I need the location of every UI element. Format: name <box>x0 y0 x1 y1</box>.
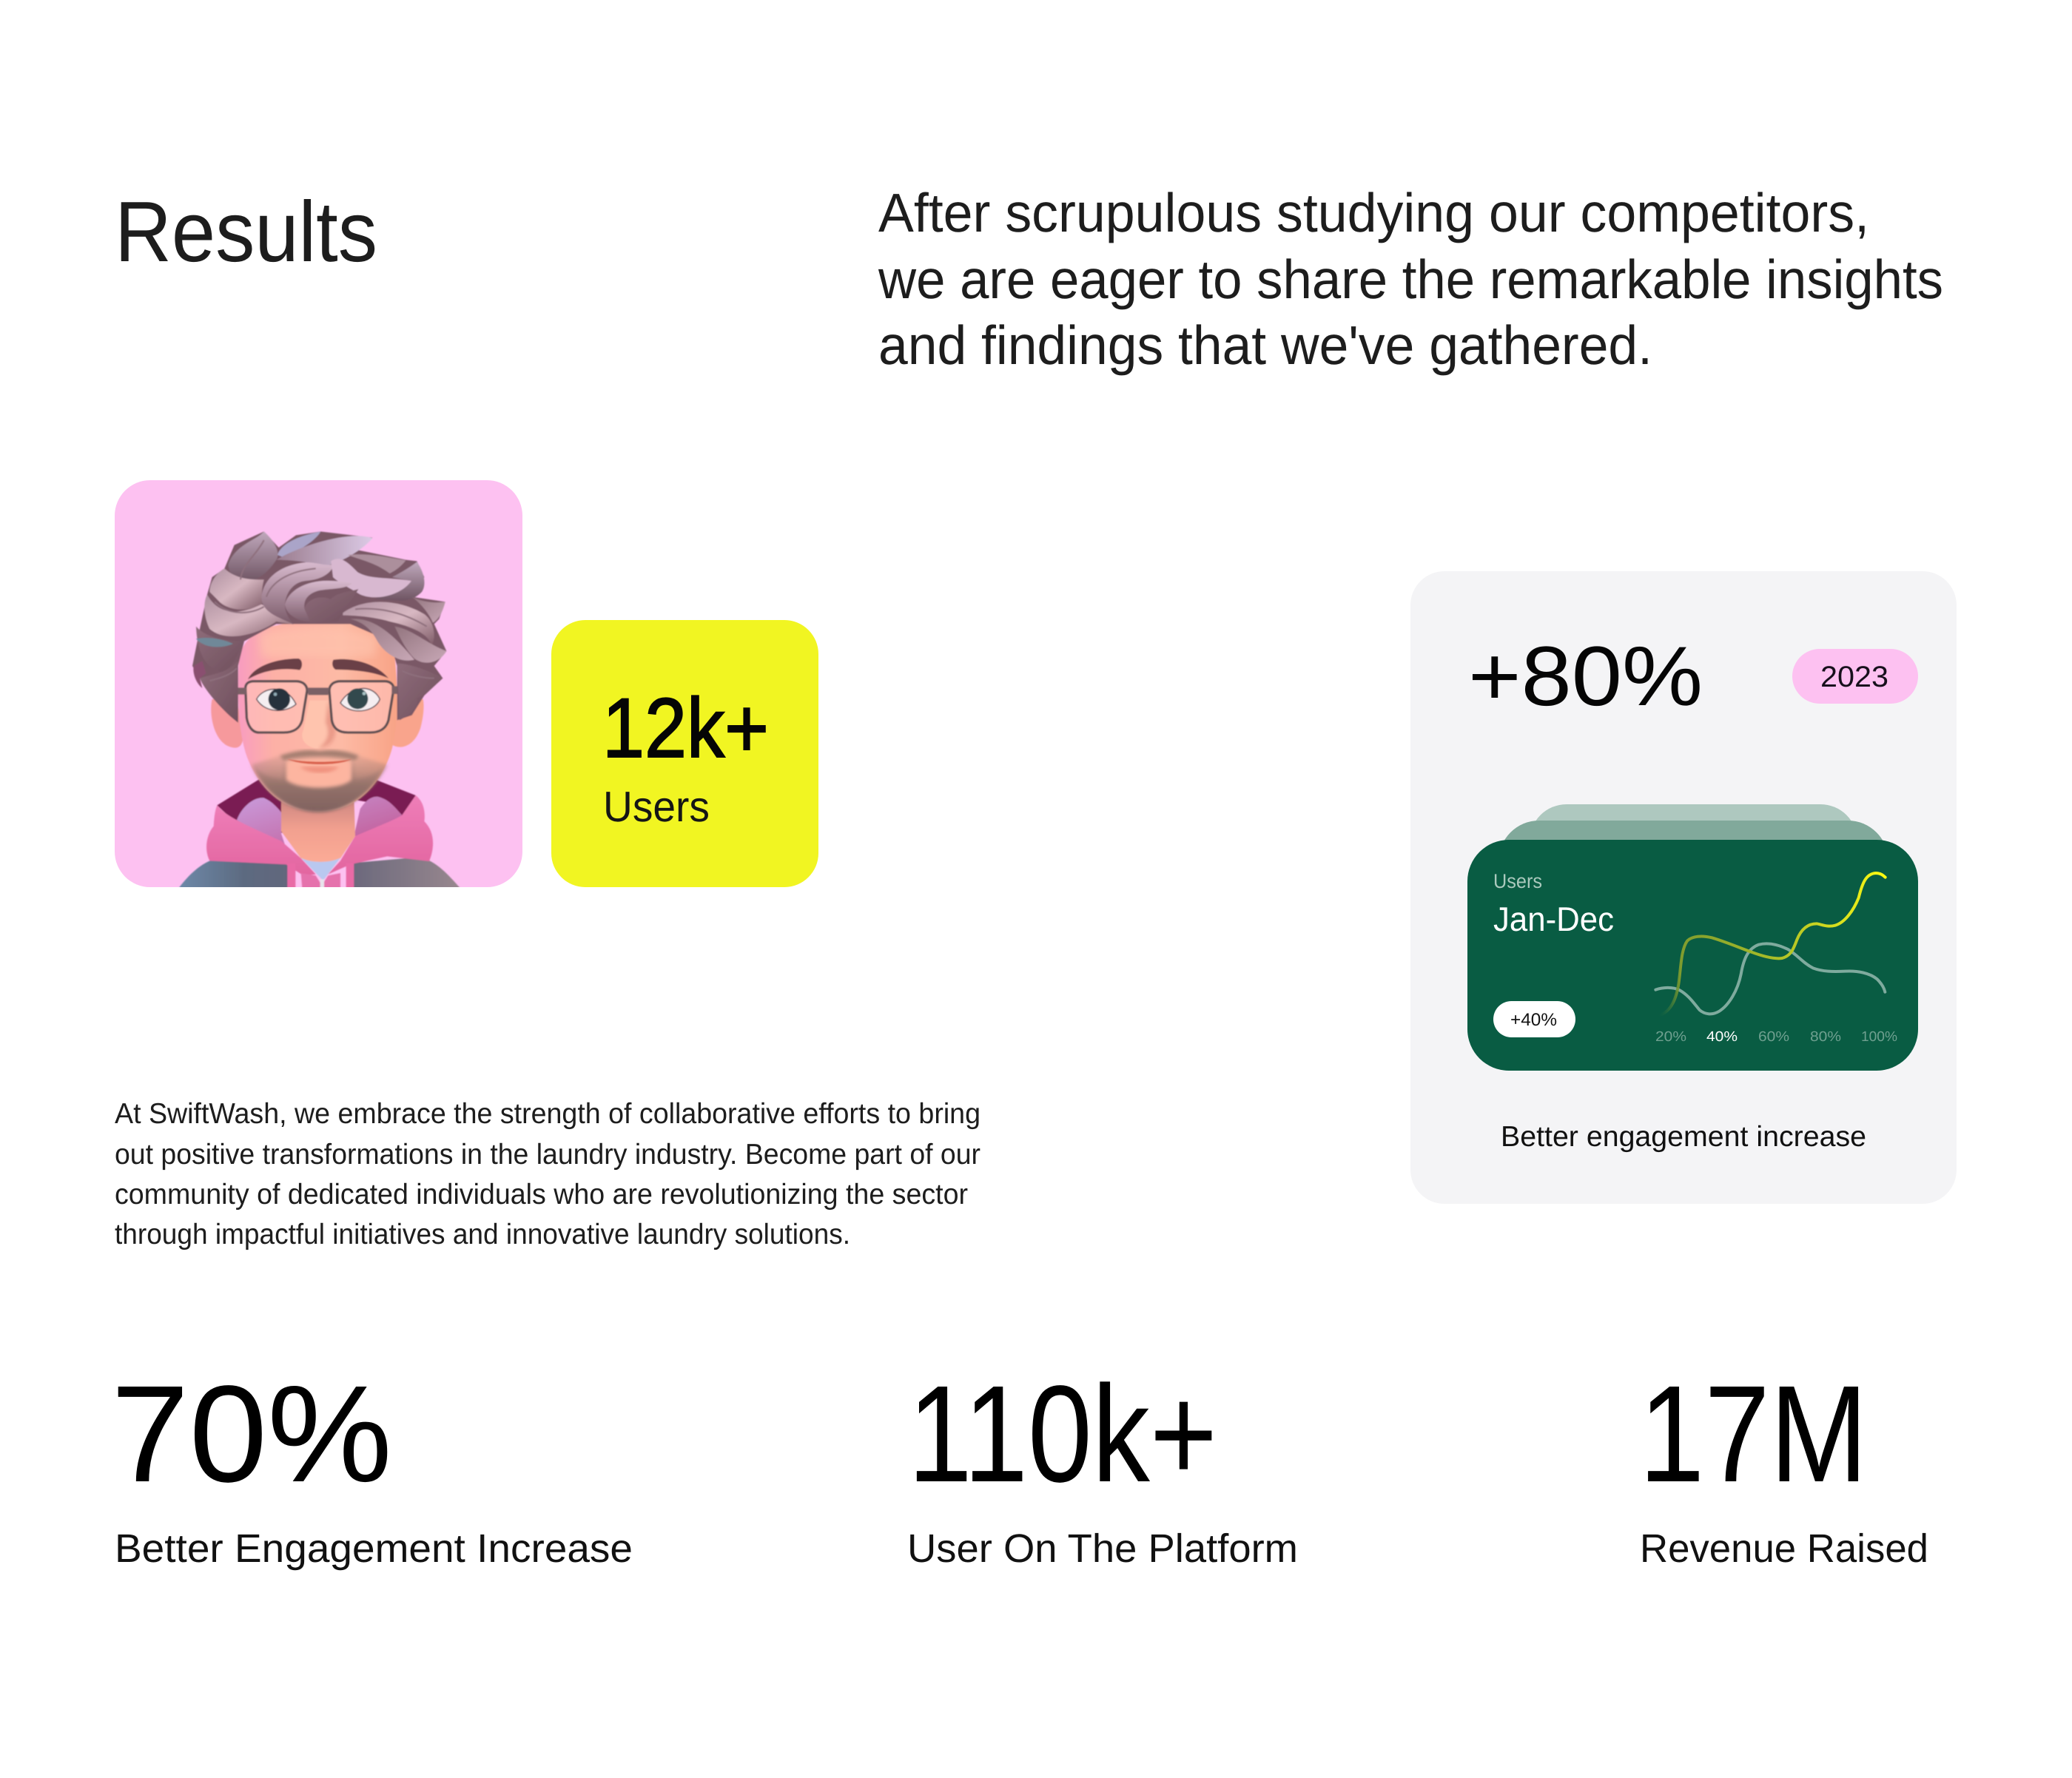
body paragraph: At SwiftWash, we embrace the strength of collaborative efforts to bring <box>115 1098 980 1130</box>
card caption: Better engagement increase <box>1501 1121 1866 1153</box>
stat: 110k+: 110k+ <box>908 1358 1217 1511</box>
stat: 70% <box>111 1358 633 1571</box>
intro paragraph: we are eager to share the remarkable insights <box>878 249 1943 310</box>
body paragraph: out positive transformations in the laundry industry. Become part of our <box>115 1139 980 1171</box>
stat: 110k+ <box>907 1358 1298 1571</box>
stat: 70%: 70% <box>111 1358 392 1511</box>
change badge <box>1493 1001 1575 1037</box>
stat label: User On The Platform <box>907 1526 1298 1571</box>
chart axis labels: 80% <box>1810 1029 1841 1045</box>
chart axis labels: 60% <box>1758 1029 1789 1045</box>
body paragraph <box>115 1098 980 1250</box>
stat value: 12k+ <box>602 681 769 775</box>
chart axis labels: 40% <box>1706 1029 1738 1045</box>
stacked back cards <box>1498 804 1888 909</box>
stat: 17M: 17M <box>1639 1358 1868 1511</box>
intro paragraph: After scrupulous studying our competitors, <box>878 182 1869 243</box>
year badge: 2023 <box>1820 661 1888 693</box>
green chart card <box>1467 840 1918 1071</box>
intro paragraph <box>878 182 1943 376</box>
chart axis labels: 100% <box>1861 1029 1897 1045</box>
card label: Users <box>1493 870 1542 892</box>
stat label: Revenue Raised <box>1640 1526 1928 1571</box>
intro paragraph: and findings that we've gathered. <box>878 314 1652 376</box>
stat label: Better Engagement Increase <box>115 1526 633 1571</box>
chart axis labels: 20% <box>1655 1029 1686 1045</box>
stat label: Users <box>603 783 710 831</box>
body paragraph: community of dedicated individuals who are revolutionizing the sector <box>115 1179 968 1210</box>
chart axis labels <box>1655 1029 1897 1045</box>
headline value: +80% <box>1468 630 1703 724</box>
avatar panel <box>115 480 522 888</box>
year badge <box>1792 649 1918 704</box>
title: Results <box>115 183 377 280</box>
change badge: +40% <box>1510 1010 1557 1030</box>
panel: engagement card <box>1410 571 1957 1204</box>
line chart <box>1655 873 1886 1015</box>
stat card: 12k+ users <box>551 620 818 887</box>
avatar illustration <box>179 531 460 888</box>
body paragraph: through impactful initiatives and innovative laundry solutions. <box>115 1219 850 1250</box>
stat: 17M <box>1639 1358 1928 1571</box>
card date range: Jan-Dec <box>1493 900 1614 938</box>
